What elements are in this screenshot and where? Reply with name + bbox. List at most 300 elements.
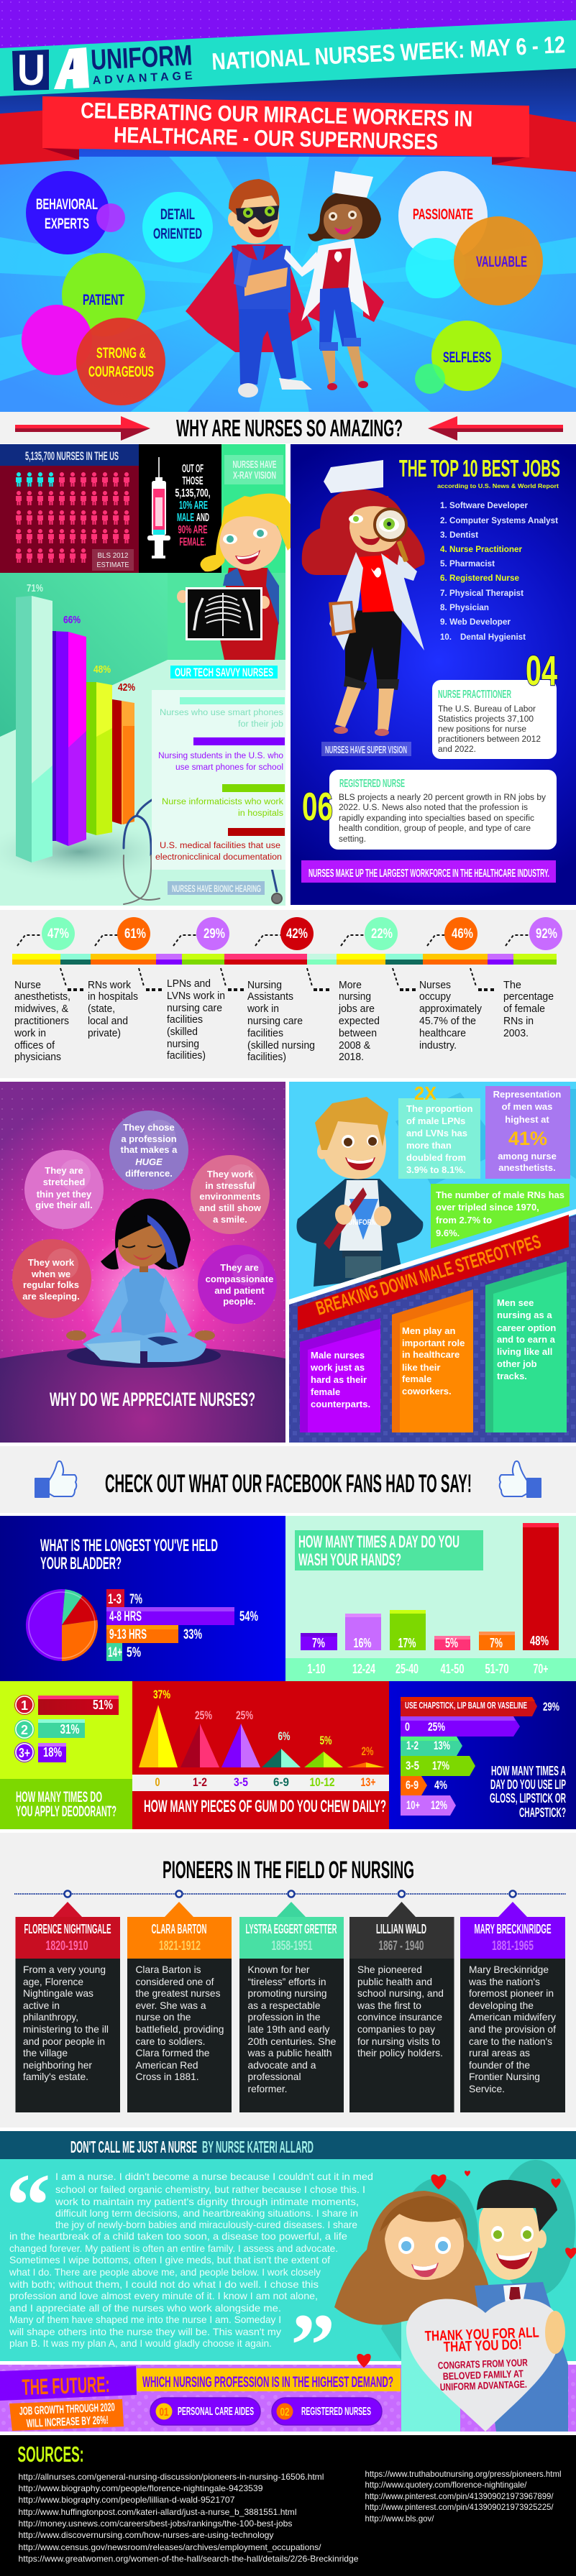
timeline [14, 1890, 566, 1898]
stat text columns: nursing care [167, 1003, 222, 1014]
source list: right column: http://www.quotery.com/florence-nightingale/ [365, 2480, 527, 2490]
essay text: what I do. There are people above me, and people below. I work closely [9, 2266, 321, 2278]
heading: tech savvy nurses [170, 666, 278, 679]
bubble: behavioral experts: EXPERTS [45, 216, 89, 232]
list: ranked jobs: 8. Physician [440, 604, 489, 612]
axis strip: 3-5 [234, 1775, 248, 1789]
box: male RNs [431, 1184, 570, 1248]
stat text columns: Nursing [247, 980, 282, 991]
panel: header [0, 0, 576, 160]
illustration: blonde nurse with x-ray [177, 494, 300, 660]
text: out of those: MALE [177, 512, 194, 524]
source list: right column [365, 2469, 561, 2524]
card: Clara Barton: battlefield, providing [135, 2023, 224, 2035]
source list: right column: http://www.pinterest.com/pin/413909021973967899/ [365, 2491, 554, 2501]
card: Lillian Wald [349, 1902, 454, 2112]
essay text: profession and love almost every minute of it. I know I am not alone, [9, 2290, 318, 2301]
source list: left column: http://www.huffingtonpost.com/kateri-allard/just-a-nurse_b_3881551.html [19, 2507, 296, 2517]
box: important role: female [402, 1374, 431, 1384]
color bar [12, 954, 557, 965]
bubble: stretched thin: They are [45, 1165, 83, 1176]
card: Lystra Eggert Gretter: LYSTRA EGGERT GRETTER [246, 1922, 337, 1936]
label: super vision [321, 742, 411, 756]
panel: facebook fans heading [0, 1446, 576, 1513]
bubble: strong and courageous: COURAGEOUS [88, 364, 154, 380]
card: Florence Nightingale: and poor people in [23, 2036, 105, 2047]
card: Clara Barton: nurse on the [135, 2011, 191, 2023]
box: work just as hard: female [311, 1386, 340, 1397]
card: Mary Breckinridge: rural areas as [469, 2047, 530, 2058]
box: career option: nursing as a [497, 1310, 552, 1320]
chart: hand washing bars: 48% [530, 1634, 549, 1648]
source list: right column: http://www.pinterest.com/pin/413909021973925225/ [365, 2502, 554, 2512]
chart: hand washing bars [301, 1523, 559, 1676]
box: nurse anesthetists: among nurse [498, 1151, 557, 1162]
label: BLS 2012 estimate: ESTIMATE [96, 561, 129, 569]
card: Lystra Eggert Gretter [239, 1902, 344, 2112]
connectors [17, 935, 530, 986]
axis strip: 10-12 [309, 1775, 335, 1789]
list: ranked jobs: Dental Hygienist [460, 633, 526, 642]
stat text columns: work in [247, 1003, 279, 1015]
source list: left column: http://money.usnews.com/careers/best-jobs/rankings/the-100-best-jobs [19, 2518, 292, 2529]
stat: clinical documentation: electronicclinical documentation [155, 853, 282, 862]
chart: arrow bars: 3-5 [406, 1759, 419, 1772]
bubble: stressful environments [191, 1155, 270, 1234]
card: Lillian Wald: for nursing visits to [357, 2036, 440, 2047]
panel: x-ray vision [168, 444, 285, 661]
card: Lillian Wald: companies to pay [357, 2023, 435, 2035]
panel: hand washing chart [285, 1516, 576, 1681]
list: ranked jobs [440, 502, 558, 642]
illustration: man opening shirt [296, 1097, 423, 1287]
card: Florence Nightingale: family's estate. [23, 2071, 88, 2082]
pictogram: people [16, 472, 129, 563]
ribbon: celebrating banner [0, 96, 576, 172]
card: Mary Breckinridge: American midwifery [469, 2011, 556, 2023]
heading: wash your hands [295, 1530, 483, 1570]
card: nurse practitioner: 04 [526, 648, 557, 694]
box: male LPNs: doubled from [406, 1152, 466, 1163]
essay text: with both; without them, I could not do what I do well. I chose this [9, 2278, 319, 2290]
bubble: compassionate: They are [220, 1262, 259, 1273]
card: Lystra Eggert Gretter: reformer. [247, 2083, 288, 2094]
card: Lystra Eggert Gretter: profession in the [247, 2011, 321, 2023]
callout: job growth: JOB GROWTH THROUGH 2020 [19, 2401, 115, 2418]
stat: informaticists: in hospitals [238, 809, 283, 818]
stat text columns: Nurses [419, 980, 451, 991]
bar: 66 percent: 66% [63, 614, 81, 626]
pill: registered nurses: REGISTERED NURSES [301, 2406, 371, 2418]
callout: job growth: WILL INCREASE BY 26%! [26, 2414, 109, 2430]
chart: arrow bars: 13% [434, 1739, 450, 1752]
illustration: red-haired nurse with magnifier [302, 460, 425, 736]
source list: left column: https://www.greatwomen.org/women-of-the-hall/search-the-hall/details/2/26-Breckinridge [19, 2554, 359, 2564]
box: male RNs: from 2.7% to [436, 1215, 492, 1225]
pill: registered nurses [272, 2398, 382, 2425]
box: nurse anesthetists: of men was [502, 1101, 552, 1112]
box: work just as hard [300, 1318, 380, 1432]
icon: stethoscope [124, 800, 282, 904]
box: nurse anesthetists [485, 1086, 570, 1179]
chart: arrow bars: 17% [432, 1759, 449, 1772]
panel: lip balm chart [389, 1681, 576, 1829]
box: male LPNs: more than [406, 1140, 452, 1151]
box: male LPNs: and LVNs has [406, 1128, 467, 1138]
card: Lillian Wald: school nursing, and [357, 1987, 444, 1999]
logo: Uniform Advantage [12, 40, 193, 94]
card: nurse practitioner [432, 648, 557, 759]
panel: why do we appreciate nurses: WHY DO WE APPRECIATE NURSES? [50, 1389, 255, 1410]
chart: bladder bars: 54% [239, 1609, 258, 1624]
source list: left column: http://www.census.gov/newsroom/releases/archives/employment_occupations/ [19, 2542, 321, 2552]
pill: personal care aides: 01 [160, 2406, 169, 2419]
icon: thumbs up left [35, 1461, 76, 1498]
panel: deodorant chart [0, 1681, 132, 1829]
stat text columns: expected [339, 1016, 380, 1027]
bubble: compassionate: compassionate [206, 1274, 273, 1284]
heart sign: THAT YOU DO! [443, 2337, 522, 2355]
logo: Uniform Advantage: U [17, 46, 45, 94]
card: Florence Nightingale: active in [23, 2000, 60, 2011]
chart: bladder bars: 1-3 [108, 1592, 122, 1607]
list: ranked jobs: 3. Dentist [440, 531, 478, 540]
card: nurse practitioner: NURSE PRACTITIONER [438, 689, 511, 701]
label: BLS 2012 estimate [92, 549, 134, 571]
chart: hand washing bars: 7% [490, 1636, 503, 1650]
card: Clara Barton: the greatest nurses [135, 1987, 220, 1999]
card: Lystra Eggert Gretter: professional [247, 2071, 301, 2082]
panel: tech stats [152, 690, 285, 870]
panel: nurses in the US pictogram: 5,135,700 NURSES IN THE US [25, 449, 119, 463]
stat text columns: approximately [419, 1003, 483, 1015]
bubble: selfless: SELFLESS [443, 349, 491, 366]
bar: 71 percent: 71% [27, 582, 43, 594]
bubble: huge difference: difference. [125, 1168, 173, 1179]
chart: arrow bars: 10+ [406, 1798, 420, 1812]
source list: left column: http://www.discovernursing.com/how-nurses-are-using-technology [19, 2530, 274, 2540]
chart: hand washing bars: 70+ [534, 1662, 548, 1676]
box: work just as hard: counterparts. [311, 1399, 370, 1409]
arrow: right [428, 416, 563, 441]
panel: gum chart: 2% [361, 1744, 374, 1758]
card: nurse practitioner: and 2022. [438, 745, 476, 754]
label: bionic hearing [168, 881, 265, 895]
text: out of those: 10% ARE [179, 500, 208, 512]
stat text columns: 2008 & [339, 1040, 370, 1052]
callout: job growth [9, 2399, 124, 2431]
panel: essay [0, 2131, 576, 2396]
stat text columns: percentage [503, 991, 554, 1003]
illustration: female supernurse [284, 171, 384, 390]
essay text: I am a nurse. I didn't become a nurse because I couldn't cut it in med [55, 2171, 373, 2182]
heading: wash your hands: HOW MANY TIMES A DAY DO YOU [298, 1532, 460, 1552]
stat text columns: nursing care [247, 1016, 303, 1027]
card: Lillian Wald: She pioneered [357, 1964, 422, 1975]
box: male LPNs: The proportion [406, 1103, 472, 1114]
stat: informaticists: Nurse informaticists who work [162, 798, 283, 806]
panel: deodorant chart: 2 [21, 1723, 28, 1737]
essay text: in the heartbreak of a child taken too soon, a disease too powerful, a life [9, 2230, 347, 2242]
panel: deodorant chart: YOU APPLY DEODORANT? [16, 1803, 116, 1820]
essay text: difficult long term decisions, and heartbreaking situations. I share in [55, 2207, 358, 2219]
bubble: selfless [415, 321, 502, 394]
card: Clara Barton: ever. She was a [135, 2000, 206, 2011]
chart: bladder bars: 7% [129, 1592, 142, 1607]
stat text columns: (state, [88, 1003, 115, 1015]
stat text columns: offices of [14, 1040, 55, 1052]
bubble: behavioral experts: BEHAVIORAL [36, 196, 98, 213]
chart: triangles [139, 1705, 385, 1767]
essay text: school or failed organic chemistry, but rather because I chose this. I [55, 2184, 365, 2195]
list: ranked jobs: 9. Web Developer [440, 618, 511, 627]
card: registered nurse: BLS projects a nearly 20 percent growth in RN jobs by [339, 794, 546, 802]
card: Lystra Eggert Gretter: “tireless” efforts in [247, 1976, 326, 1987]
panel: male female split [139, 444, 221, 573]
bubble: huge difference: HUGE [135, 1156, 163, 1167]
stat text columns: 45.7% of the [419, 1016, 476, 1027]
panel: bladder chart [0, 1516, 285, 1681]
stat text columns: LPNs and [167, 978, 211, 990]
bar: 42 percent: 42% [118, 681, 135, 694]
bubble: strong and courageous: STRONG & [96, 345, 146, 362]
pill: personal care aides [150, 2398, 260, 2425]
card: Clara Barton: Cross in 1881. [135, 2071, 198, 2082]
chart: hand washing bars: 51-70 [485, 1662, 509, 1676]
chart: arrow bars: 12% [431, 1798, 447, 1812]
panel: nurses in the US pictogram [0, 444, 139, 573]
bubble: stretched thin [24, 1150, 104, 1229]
card: Lillian Wald: LILLIAN WALD [376, 1922, 426, 1936]
card: Florence Nightingale: From a very young [23, 1964, 106, 1975]
bar: 42 percent [112, 681, 135, 824]
stat text columns [14, 978, 554, 1063]
list: ranked jobs: 4. Nurse Practitioner [440, 546, 523, 554]
panel: gum chart: 25% [236, 1708, 253, 1722]
card: Florence Nightingale: philanthropy, [23, 2011, 78, 2023]
card: Mary Breckinridge: 1881-1965 [492, 1938, 534, 1953]
card: Lillian Wald: their policy holders. [357, 2047, 443, 2058]
panel: deodorant chart: 3+ [19, 1746, 30, 1760]
card: Mary Breckinridge: Mary Breckinridge [469, 1964, 549, 1975]
chart: bladder bars: 33% [183, 1627, 202, 1642]
chart: hand washing bars: 41-50 [440, 1662, 465, 1676]
stat circles: 29% [204, 926, 225, 942]
text: out of those: 90% ARE [178, 524, 208, 536]
card: registered nurse [302, 770, 557, 850]
ribbon: celebrating banner: HEALTHCARE - OUR SUPERNURSES [114, 122, 439, 155]
card: Florence Nightingale: Nightingale was [23, 1987, 93, 1999]
card: registered nurse: rapidly expanding into specialties based on specific [339, 814, 534, 823]
chart: hand washing bars: 5% [445, 1636, 458, 1650]
chart: arrow bars: 0 [405, 1720, 410, 1734]
stat text columns: Assistants [247, 991, 293, 1003]
card: nurse practitioner: new positions for nurse [438, 725, 526, 734]
bubble: passionate and valuable: VALUABLE [476, 254, 527, 270]
stat text columns: nursing [339, 991, 371, 1003]
stat circles: 47% [47, 926, 69, 942]
box: career option: career option [497, 1322, 556, 1333]
card: Mary Breckinridge: foremost pioneer in [469, 1987, 554, 1999]
source list: left column [19, 2472, 359, 2564]
illustration: couple with thank-you heart [334, 2160, 576, 2432]
panel: deodorant chart: 51% [93, 1698, 113, 1712]
bar: 48 percent [86, 663, 112, 835]
stat text columns: jobs are [338, 1003, 375, 1015]
heart sign: BELOVED FAMILY AT [443, 2368, 524, 2382]
panel: deodorant chart: 31% [60, 1722, 79, 1736]
heading: essay title: BY NURSE KATERI ALLARD [202, 2138, 314, 2156]
card: Mary Breckinridge: founder of the [469, 2059, 530, 2071]
heading: wash your hands: WASH YOUR HANDS? [298, 1550, 401, 1570]
heart sign: CONGRATS FROM YOUR [438, 2357, 528, 2371]
essay text: Sometimes I wipe bottoms, often I give meds, but that isn't the extent of [9, 2254, 330, 2266]
panel: sources: SOURCES: [17, 2442, 83, 2467]
card: Mary Breckinridge: developing the [469, 2000, 534, 2011]
bubble: stretched thin: give their all. [35, 1200, 93, 1210]
bubble: compassionate [198, 1245, 277, 1324]
icon: close quote: ” [291, 2296, 335, 2396]
essay text: work to maintain my patient's dignity through intimate moments, [55, 2196, 359, 2207]
panel: deodorant chart: 1 [21, 1698, 28, 1713]
box: nurse anesthetists: Representation [493, 1089, 561, 1100]
ribbon: celebrating banner: CELEBRATING OUR MIRACLE WORKERS IN [81, 98, 472, 132]
panel: gum chart: 37% [153, 1688, 170, 1701]
stat circles: 22% [371, 926, 393, 942]
text: out of those: THOSE [183, 475, 204, 487]
box: male RNs: The number of male RNs has [436, 1190, 564, 1200]
panel: x-ray vision: NURSES HAVE [233, 459, 276, 471]
stat text columns: between [339, 1028, 377, 1039]
box: important role: important role [402, 1338, 465, 1348]
stat: clinical documentation [155, 828, 285, 862]
card: registered nurse: health condition, group of people, and type of care [339, 824, 531, 833]
bubble: detail oriented [142, 192, 213, 262]
stat circles [42, 917, 562, 950]
bubble: strong and courageous [22, 305, 165, 405]
stat text columns: The [503, 980, 521, 991]
stat: smart phones at school: use smart phones for school [175, 763, 283, 772]
heading: tech savvy nurses: OUR TECH SAVVY NURSES [175, 666, 273, 679]
bubble: compassionate: people. [223, 1296, 256, 1307]
stat text columns: RNs in [503, 1016, 534, 1027]
card: Mary Breckinridge [460, 1902, 565, 2112]
label: BLS 2012 estimate: BLS 2012 [98, 552, 129, 560]
bubble: patient: PATIENT [83, 292, 124, 308]
stat text columns: facilities) [167, 1050, 206, 1062]
card: Clara Barton: considered one of [135, 1976, 214, 1987]
panel: tech savvy chart [0, 573, 285, 906]
chart: arrow bars: 6-9 [406, 1778, 419, 1792]
list: ranked jobs: 10. [440, 633, 452, 642]
label: bionic hearing: NURSES HAVE BIONIC HEARING [172, 883, 261, 894]
box: male RNs: 9.6%. [436, 1228, 460, 1238]
box: career option: and to earn a [497, 1334, 556, 1345]
heading: the future [0, 2366, 137, 2401]
list: ranked jobs: 6. Registered Nurse [440, 574, 519, 583]
panel: hero background [0, 157, 576, 413]
bubble: stressful environments: a smile. [213, 1214, 247, 1225]
chart: pie [26, 1589, 98, 1661]
chart: arrow bars: 1-2 [406, 1739, 419, 1752]
box: important role: coworkers. [402, 1386, 452, 1397]
panel: top 10 best jobs: according to U.S. News & World Report [437, 482, 559, 489]
card: Florence Nightingale: 1820-1910 [46, 1938, 88, 1953]
chart: hand washing bars: 25-40 [396, 1662, 419, 1676]
heading band: why are nurses so amazing [0, 412, 576, 443]
arrow: left [15, 416, 150, 441]
stat text columns: of female [503, 1003, 545, 1015]
bubble: stressful environments: They work [207, 1169, 254, 1179]
panel: gum chart: 6% [278, 1729, 291, 1743]
bar: 71 percent [16, 582, 52, 862]
illustration: meditating nurse [66, 1199, 221, 1368]
bubble: detail oriented: ORIENTED [153, 226, 202, 242]
stat text columns: midwives, & [14, 1003, 68, 1015]
stat text columns: facilities) [247, 1052, 286, 1063]
bubble: huge difference [109, 1110, 188, 1190]
bubble: huge difference: that makes a [121, 1144, 178, 1155]
box: work just as hard: Male nurses [311, 1350, 365, 1361]
card: Mary Breckinridge: and the provision of [469, 2023, 556, 2035]
card: Florence Nightingale: ministering to the ill [23, 2023, 109, 2035]
card: Florence Nightingale: the village [23, 2047, 68, 2058]
panel: gum chart: 5% [319, 1734, 332, 1747]
list: ranked jobs: 7. Physical Therapist [440, 589, 524, 598]
heart sign: UNIFORM ADVANTAGE. [440, 2378, 527, 2393]
bubble: stressful environments: in stressful [205, 1180, 255, 1191]
source list: left column: http://www.biography.com/people/lillian-d-wald-9521707 [19, 2495, 235, 2505]
card: registered nurse: REGISTERED NURSE [339, 778, 405, 790]
panel: pioneers [0, 1833, 576, 2128]
chart: hand washing bars: 12-24 [352, 1662, 375, 1676]
panel: breaking down male stereotypes [289, 1082, 576, 1443]
source list: right column: https://www.truthaboutnursing.org/press/pioneers.html [365, 2469, 561, 2479]
heart sign [406, 2299, 565, 2432]
panel: gum chart: 25% [195, 1708, 212, 1722]
stat text columns: healthcare [419, 1028, 466, 1039]
bar: 48 percent: 48% [93, 663, 111, 676]
bubble: passionate and valuable [398, 171, 543, 305]
card: Lystra Eggert Gretter: promoting nursing [247, 1987, 326, 1999]
chart: arrow bars: 29% [543, 1700, 559, 1714]
essay text: the joy of newly-born babies and miraculously-cured diseases. I share [55, 2219, 357, 2230]
card: Florence Nightingale [16, 1902, 120, 2112]
list: ranked jobs: 1. Software Developer [440, 502, 529, 510]
stat text columns: occupy [419, 991, 452, 1003]
card: Lystra Eggert Gretter: was a public health [247, 2047, 332, 2058]
card: nurse practitioner: Statistics projects 37,100 [438, 715, 534, 724]
box: career option: living like all [497, 1346, 552, 1357]
source list: left column: http://allnurses.com/general-nursing-discussion/pioneers-in-nursing-16506.html [19, 2472, 324, 2482]
illustration: male supernurse [186, 179, 312, 397]
box: important role: Men play an [402, 1325, 455, 1336]
stat text columns: facilities [247, 1028, 283, 1039]
text: out of those: 5,135,700, [175, 487, 210, 500]
icon: open quote: “ [6, 2156, 50, 2255]
essay text [9, 2171, 373, 2349]
chart: arrow bars [401, 1697, 559, 1816]
box: career option [485, 1261, 567, 1432]
card: Florence Nightingale: neighboring her [23, 2059, 92, 2071]
card: registered nurse: setting. [339, 835, 366, 844]
stat: smart phones at job [160, 697, 285, 729]
card: Lillian Wald: convince insurance [357, 2011, 442, 2023]
panel: bladder chart: YOUR BLADDER? [40, 1554, 122, 1573]
stat text columns: practitioners [14, 1016, 69, 1027]
chart: bladder bars: 5% [127, 1645, 141, 1660]
stat: informaticists [162, 784, 285, 818]
